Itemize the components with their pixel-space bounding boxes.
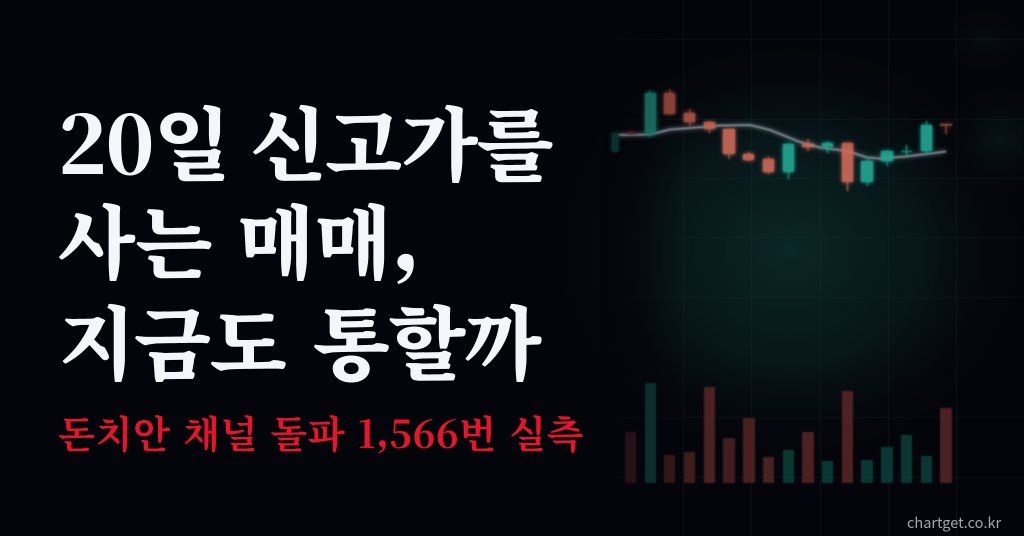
- title line 1: 20일 신고가를: [58, 82, 552, 197]
- website watermark: chartget.co.kr: [907, 512, 1001, 533]
- candlesticks: [612, 89, 952, 191]
- subtitle: 돈치안 채널 돌파 1,566번 실측: [58, 404, 584, 459]
- title line 3: 지금도 통할까: [58, 281, 540, 396]
- moving average line: [618, 125, 946, 158]
- title line 2: 사는 매매,: [58, 180, 419, 295]
- title and subtitle text block: [58, 82, 584, 459]
- volume bars: [625, 383, 952, 483]
